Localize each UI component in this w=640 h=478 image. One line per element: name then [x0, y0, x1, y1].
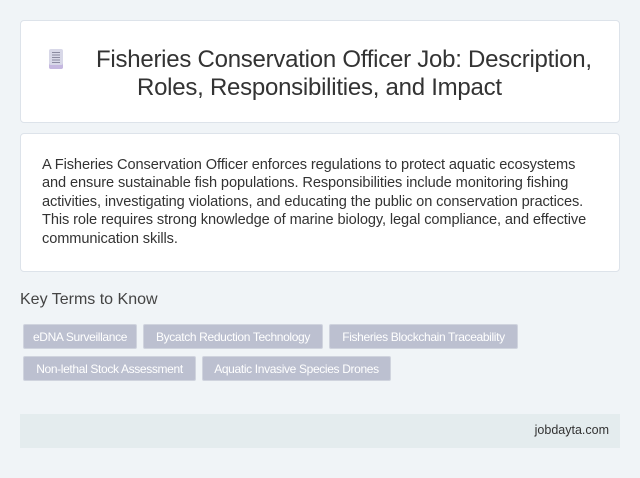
tag: Aquatic Invasive Species Drones — [214, 362, 379, 376]
footer text: jobdayta.com — [535, 423, 609, 437]
footer — [20, 414, 620, 448]
description text: activities, investigating violations, and educating the public on conservation practices. — [42, 194, 583, 210]
heading: key terms: Key Terms to Know — [20, 291, 158, 308]
title card — [20, 20, 620, 123]
description text: and ensure sustainable fish populations. Responsibilities include monitoring fishing — [42, 175, 568, 191]
title — [96, 46, 592, 101]
tag: Fisheries Blockchain Traceability — [342, 330, 505, 344]
title: Fisheries Conservation Officer Job: Description, — [96, 46, 592, 73]
tag — [329, 324, 518, 349]
tag — [23, 324, 137, 349]
tag — [202, 356, 391, 381]
tag: Bycatch Reduction Technology — [156, 330, 310, 344]
description text: communication skills. — [42, 231, 178, 247]
tag: eDNA Surveillance — [33, 330, 127, 344]
tag — [143, 324, 323, 349]
description card — [20, 133, 620, 272]
tag — [23, 356, 196, 381]
description text — [42, 157, 586, 247]
description text: A Fisheries Conservation Officer enforces regulations to protect aquatic ecosystems — [42, 157, 575, 173]
tag: Non-lethal Stock Assessment — [36, 362, 183, 376]
description text: This role requires strong knowledge of marine biology, legal compliance, and effective — [42, 212, 586, 228]
title: Roles, Responsibilities, and Impact — [137, 74, 502, 101]
icon: document — [49, 49, 63, 69]
